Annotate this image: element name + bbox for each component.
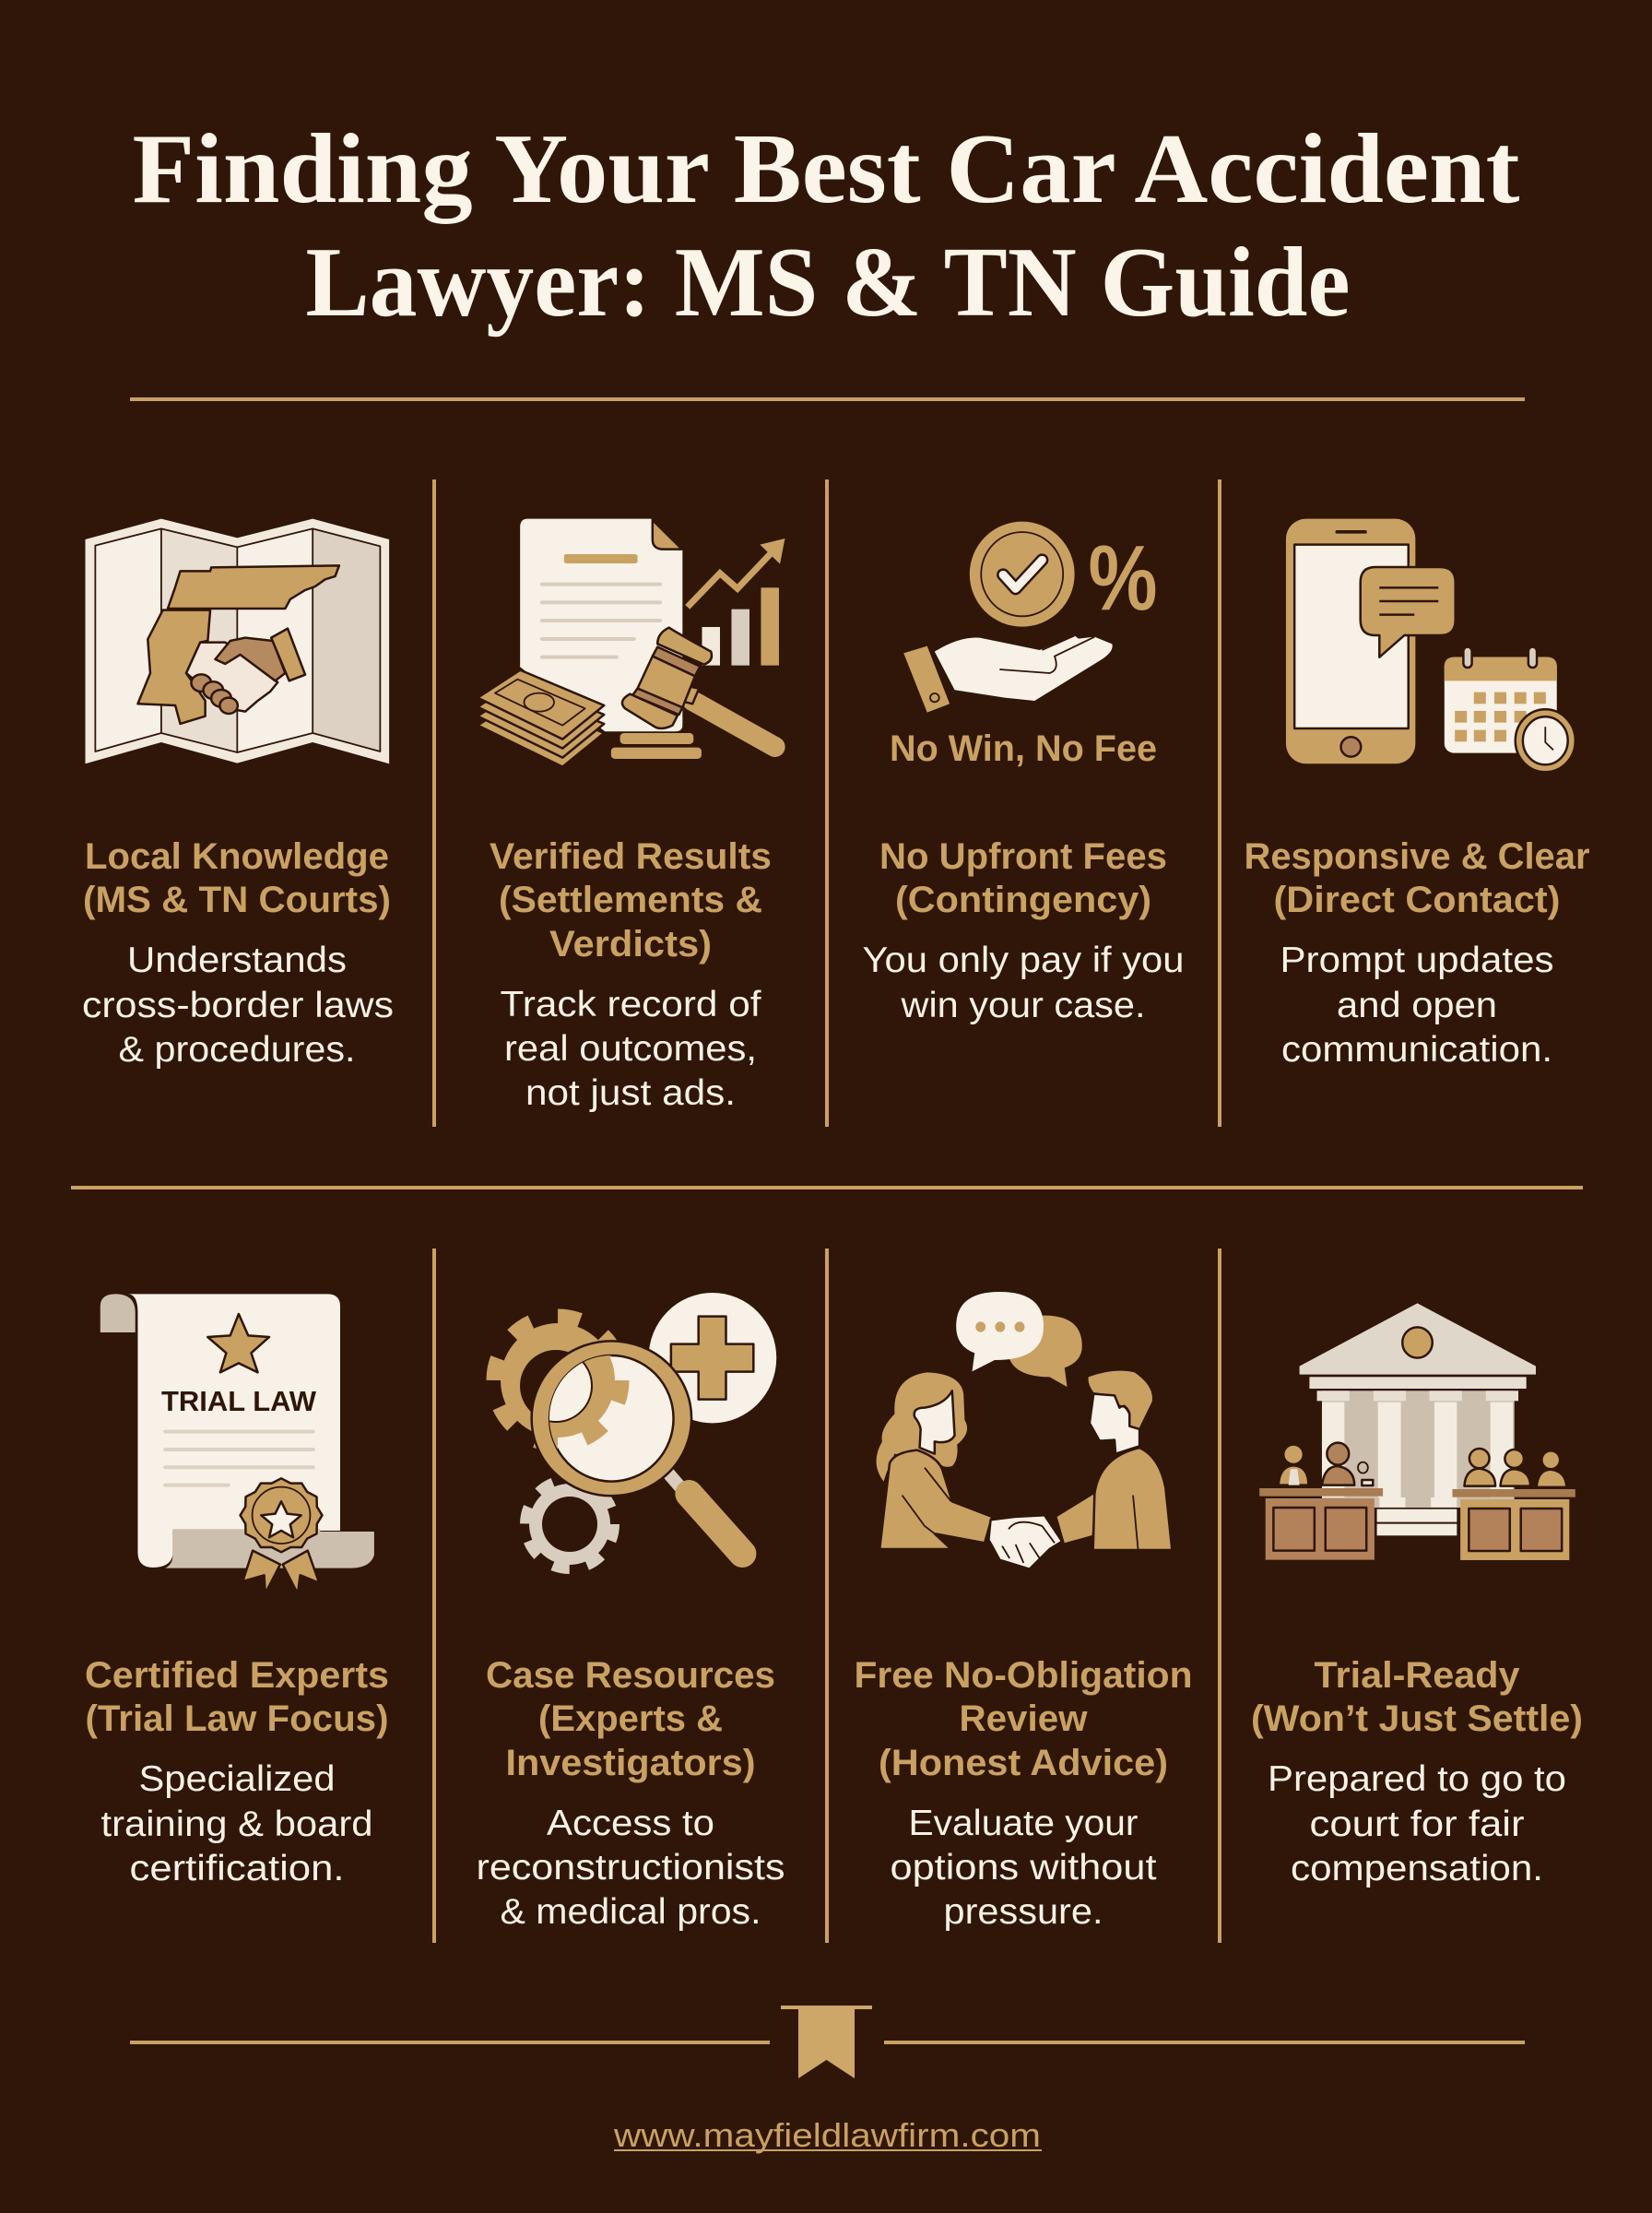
panel: certified experts xyxy=(85,1294,389,1888)
description: responsive and clear: and open xyxy=(1337,986,1497,1025)
heading: free no-obligation review: Free No-Obligation xyxy=(854,1655,1193,1696)
heading: trial-ready: (Won’t Just Settle) xyxy=(1251,1698,1583,1739)
description: local knowledge: cross-border laws xyxy=(82,986,394,1025)
heading: free no-obligation review xyxy=(854,1655,1193,1783)
description: case resources xyxy=(476,1804,785,1932)
description: responsive and clear xyxy=(1280,941,1554,1070)
description: certified experts: Specialized xyxy=(138,1759,336,1799)
heading: responsive and clear: (Direct Contact) xyxy=(1274,880,1560,920)
heading: verified results: (Settlements & xyxy=(499,880,762,920)
heading: local knowledge: (MS & TN Courts) xyxy=(83,880,391,920)
icon: folded map with state outlines and handshake xyxy=(86,519,389,763)
icon: trial law certificate scroll with seal: TRIAL LAW xyxy=(161,1385,317,1417)
description: verified results: Track record of xyxy=(500,985,761,1024)
description: free no-obligation review: pressure. xyxy=(944,1892,1103,1932)
description: trial-ready: compensation. xyxy=(1291,1849,1543,1888)
panel: free no-obligation review xyxy=(854,1292,1193,1932)
icon: trial law certificate scroll with seal xyxy=(100,1294,374,1593)
panel: trial-ready xyxy=(1251,1303,1583,1888)
man xyxy=(1089,1371,1152,1432)
heading: local knowledge xyxy=(83,836,391,920)
description: no upfront fees xyxy=(863,941,1184,1025)
icon: two people shaking hands with speech bubbles xyxy=(877,1292,1172,1569)
description: certified experts xyxy=(101,1759,372,1888)
gavel xyxy=(692,701,775,747)
description: responsive and clear: Prompt updates xyxy=(1280,941,1554,980)
heading: verified results xyxy=(490,836,772,964)
description: verified results: real outcomes, xyxy=(504,1029,757,1069)
heading: no upfront fees: (Contingency) xyxy=(895,880,1151,920)
footer divider with ribbon xyxy=(130,2006,1525,2078)
description: free no-obligation review: options without xyxy=(891,1848,1157,1888)
panel: no upfront fees xyxy=(863,522,1184,1025)
heading: responsive and clear xyxy=(1245,836,1589,920)
description: local knowledge: Understands xyxy=(127,941,347,980)
icon: courthouse with judge and jury benches xyxy=(1259,1303,1575,1560)
icon: bookmark ribbon xyxy=(781,2006,872,2078)
heading: no upfront fees: No Upfront Fees xyxy=(879,836,1167,877)
icon: document, money, gavel and growth chart xyxy=(478,519,785,767)
money stack xyxy=(478,698,604,767)
heading: no upfront fees xyxy=(879,836,1167,920)
icon: gears, medical cross and magnifying glass xyxy=(495,1293,776,1568)
heading: certified experts xyxy=(85,1655,389,1739)
judge bench xyxy=(1283,1445,1304,1464)
woman xyxy=(877,1372,967,1482)
icon: coin with checkmark over open hand: % xyxy=(1088,527,1158,630)
heading: local knowledge: Local Knowledge xyxy=(85,836,389,877)
description: certified experts: training & board xyxy=(101,1805,372,1844)
heading: free no-obligation review: (Honest Advice) xyxy=(879,1743,1168,1783)
icon: phone, chat bubble, calendar and clock xyxy=(1286,519,1575,772)
title: Finding Your Best Car Accident xyxy=(133,114,1520,224)
description: case resources: reconstructionists xyxy=(476,1848,785,1888)
description: certified experts: certification. xyxy=(129,1849,345,1888)
description: verified results xyxy=(500,985,761,1113)
heading: certified experts: Certified Experts xyxy=(85,1655,389,1696)
panel: responsive and clear xyxy=(1245,519,1589,1070)
panel: case resources xyxy=(476,1293,785,1932)
Mississippi xyxy=(137,610,210,724)
heading: case resources: (Experts & xyxy=(538,1698,723,1739)
heading: verified results: Verdicts) xyxy=(549,924,712,964)
heading: trial-ready: Trial-Ready xyxy=(1315,1655,1520,1696)
heading: responsive and clear: Responsive & Clear xyxy=(1245,836,1589,877)
description: trial-ready: Prepared to go to xyxy=(1268,1759,1566,1799)
description: free no-obligation review xyxy=(891,1804,1157,1932)
description: case resources: & medical pros. xyxy=(500,1892,761,1932)
heading: trial-ready xyxy=(1251,1655,1583,1739)
description: no upfront fees: win your case. xyxy=(900,986,1145,1025)
handshake xyxy=(988,1515,1062,1569)
description: case resources: Access to xyxy=(547,1804,714,1843)
description: no upfront fees: You only pay if you xyxy=(863,941,1184,980)
panel: local knowledge xyxy=(82,519,394,1070)
panel: verified results xyxy=(478,519,785,1113)
heading: certified experts: (Trial Law Focus) xyxy=(85,1698,389,1739)
icon: coin with checkmark over open hand: No Win, No Fee xyxy=(890,728,1157,769)
description: local knowledge xyxy=(82,941,394,1070)
heading: case resources xyxy=(486,1655,775,1783)
footer website link: www.mayfieldlawfirm.com xyxy=(613,2116,1041,2154)
heading: free no-obligation review: Review xyxy=(959,1698,1088,1739)
description: trial-ready: court for fair xyxy=(1309,1805,1525,1844)
icon: coin with checkmark over open hand xyxy=(890,522,1158,769)
description: trial-ready xyxy=(1268,1759,1566,1888)
title xyxy=(133,114,1520,337)
description: local knowledge: & procedures. xyxy=(118,1030,356,1070)
heading: verified results: Verified Results xyxy=(490,836,772,877)
description: responsive and clear: communication. xyxy=(1281,1030,1552,1070)
title: Lawyer: MS & TN Guide xyxy=(306,228,1350,337)
heading: case resources: Case Resources xyxy=(486,1655,775,1696)
heading: case resources: Investigators) xyxy=(505,1743,756,1783)
description: verified results: not just ads. xyxy=(525,1073,736,1113)
Tennessee xyxy=(168,565,339,609)
jury bench xyxy=(1469,1449,1490,1468)
description: free no-obligation review: Evaluate your xyxy=(909,1804,1139,1843)
